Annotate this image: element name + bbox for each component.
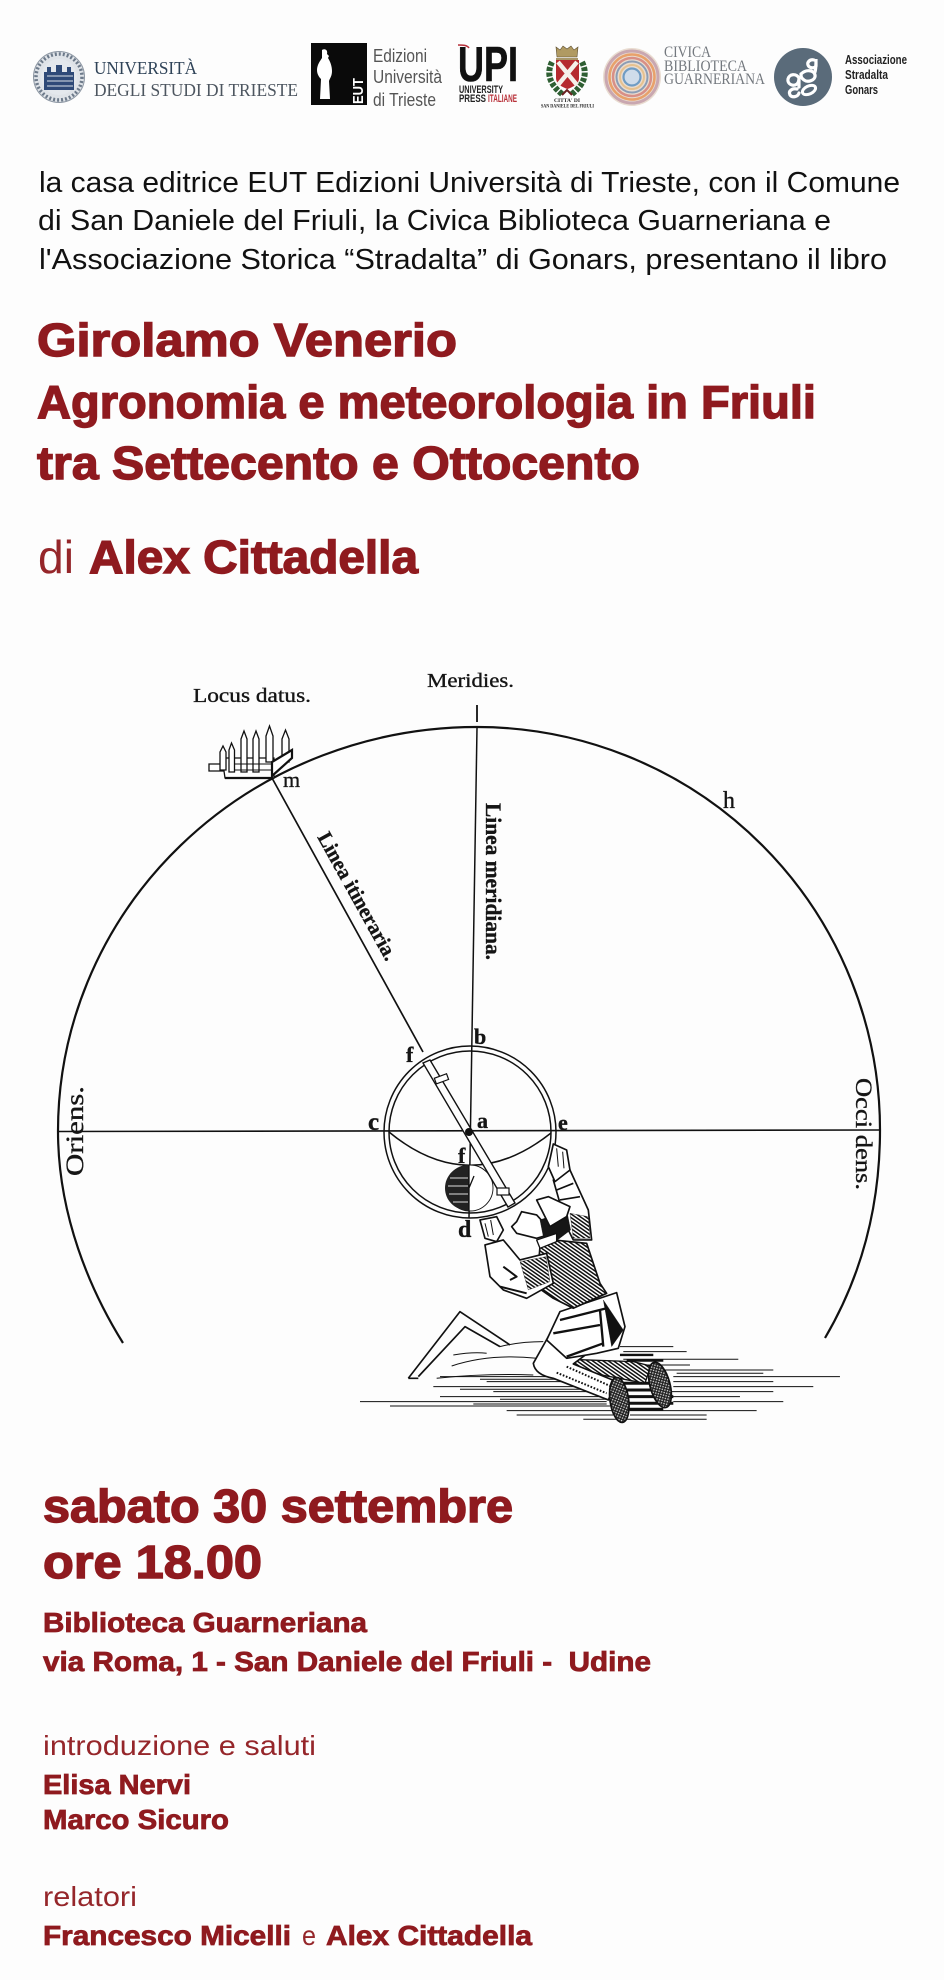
book title	[37, 314, 816, 489]
date and time: ore 18.00	[43, 1536, 262, 1588]
logo: Civica Biblioteca Guarneriana	[603, 44, 766, 106]
astrolabe rings	[384, 1046, 556, 1218]
logo: Università degli Studi di Trieste: UNIVERSITÀ	[94, 58, 197, 78]
intro text block: la casa editrice EUT Edizioni Università di Trieste, con il Comune	[39, 167, 900, 199]
logos row	[34, 38, 907, 110]
raised right arm	[553, 1170, 592, 1240]
raised hand	[548, 1144, 570, 1182]
speakers: Francesco Micelli	[43, 1920, 291, 1951]
letters on astrolabe: c	[368, 1109, 379, 1136]
label: Oriens: Oriens.	[62, 1086, 89, 1176]
right leg and foot	[570, 1359, 651, 1383]
logo: Associazione Stradalta Gonars	[774, 48, 907, 106]
book title: tra Settecento e Ottocento	[37, 437, 640, 489]
logo: Associazione Stradalta Gonars: Stradalta	[845, 68, 889, 82]
meridian line	[469, 728, 477, 1218]
ground hatching	[360, 1347, 840, 1419]
icon: town on the horizon	[209, 726, 292, 778]
logo: Civica Biblioteca Guarneriana: GUARNERIANA	[664, 71, 766, 88]
logo: University Press Italiane: PRESS	[459, 93, 486, 105]
logo: Università degli Studi di Trieste: DEGLI STUDI DI TRIESTE	[94, 80, 298, 100]
head	[512, 1212, 553, 1238]
letters on astrolabe: e	[558, 1110, 568, 1135]
torso	[537, 1240, 607, 1308]
introduction speakers: Elisa Nervi	[43, 1769, 191, 1800]
letter m: m	[283, 767, 300, 792]
woodcut illustration: astrolabe and kneeling astronomer	[58, 670, 880, 1424]
logo: Civica Biblioteca Guarneriana: BIBLIOTECA	[664, 58, 748, 75]
letters on astrolabe: d	[458, 1217, 472, 1243]
book title: Girolamo Venerio	[37, 314, 457, 366]
letters on astrolabe: f	[458, 1143, 466, 1168]
author line: di	[38, 531, 74, 583]
speakers: relatori	[43, 1881, 137, 1912]
venue: via Roma, 1 - San Daniele del Friuli - Udine	[43, 1646, 651, 1677]
great arc	[58, 727, 880, 1343]
itinerary line	[272, 778, 423, 1052]
author line: Alex Cittadella	[89, 531, 419, 583]
label: Linea meridiana: Linea meridiana.	[481, 803, 506, 960]
logo: EUT Edizioni Università di Trieste: Università	[373, 67, 443, 87]
wedge quadrant	[408, 1312, 510, 1378]
kneeling astronomer and ground	[360, 1144, 840, 1424]
forearm and sleeve	[485, 1240, 553, 1298]
date and time: sabato 30 settembre	[43, 1480, 513, 1532]
logo: Associazione Stradalta Gonars: Gonars	[845, 83, 878, 97]
logo: Città di San Daniele del Friuli crest	[541, 46, 594, 110]
date and time	[43, 1480, 513, 1588]
intro text block	[38, 167, 900, 276]
alidade rod	[423, 1060, 515, 1207]
logo: University Press Italiane: ITALIANE	[488, 93, 517, 105]
logo: University Press Italiane	[458, 38, 518, 105]
horizon line	[58, 1130, 880, 1132]
hill lines	[437, 1342, 543, 1378]
venue: Biblioteca Guarneriana	[43, 1607, 368, 1638]
open hand	[480, 1217, 503, 1242]
hips	[547, 1293, 625, 1358]
logo: Associazione Stradalta Gonars: Associazione	[845, 53, 907, 67]
small globe	[445, 1165, 493, 1211]
label: Locus datus: Locus datus.	[193, 685, 311, 707]
letters on astrolabe: f	[406, 1042, 414, 1067]
logo: EUT Edizioni Università di Trieste: EUT	[350, 78, 367, 104]
label: Meridies: Meridies.	[427, 670, 514, 692]
book title: Agronomia e meteorologia in Friuli	[37, 376, 816, 428]
letters on astrolabe	[368, 1024, 568, 1243]
introduction speakers	[43, 1730, 316, 1835]
logo: Città di San Daniele del Friuli crest: SAN DANIELE DEL FRIULI	[541, 104, 594, 110]
logo: EUT Edizioni Università di Trieste: di Trieste	[373, 90, 436, 110]
logo: Università degli Studi di Trieste	[34, 52, 298, 102]
left leg and foot	[533, 1337, 617, 1400]
tick at meridian	[476, 705, 478, 722]
logo: Città di San Daniele del Friuli crest: CITTA' DI	[554, 98, 580, 104]
label: Linea itineraria: Linea itineraria.	[313, 828, 403, 964]
logo: EUT Edizioni Università di Trieste: Edizioni	[373, 46, 427, 66]
intro text block: di San Daniele del Friuli, la Civica Biblioteca Guarneriana e	[38, 205, 831, 237]
introduction speakers: Marco Sicuro	[43, 1804, 229, 1835]
letters on astrolabe: a	[477, 1108, 488, 1133]
speakers: e	[302, 1920, 316, 1951]
logo: EUT Edizioni Università di Trieste	[311, 43, 443, 110]
speakers	[43, 1881, 532, 1951]
logo: University Press Italiane: UNIVERSITY	[459, 84, 503, 96]
letters on astrolabe: b	[474, 1024, 486, 1049]
speakers: Alex Cittadella	[326, 1920, 532, 1951]
logo: University Press Italiane: UPI	[458, 38, 518, 92]
label: Occidens: Occi dens.	[851, 1078, 876, 1190]
introduction speakers: introduzione e saluti	[43, 1730, 316, 1761]
letter h on arc: h	[723, 788, 735, 814]
intro text block: l'Associazione Storica “Stradalta” di Gonars, presentano il libro	[39, 244, 887, 276]
venue	[43, 1607, 651, 1677]
logo: Civica Biblioteca Guarneriana: CIVICA	[664, 44, 712, 61]
